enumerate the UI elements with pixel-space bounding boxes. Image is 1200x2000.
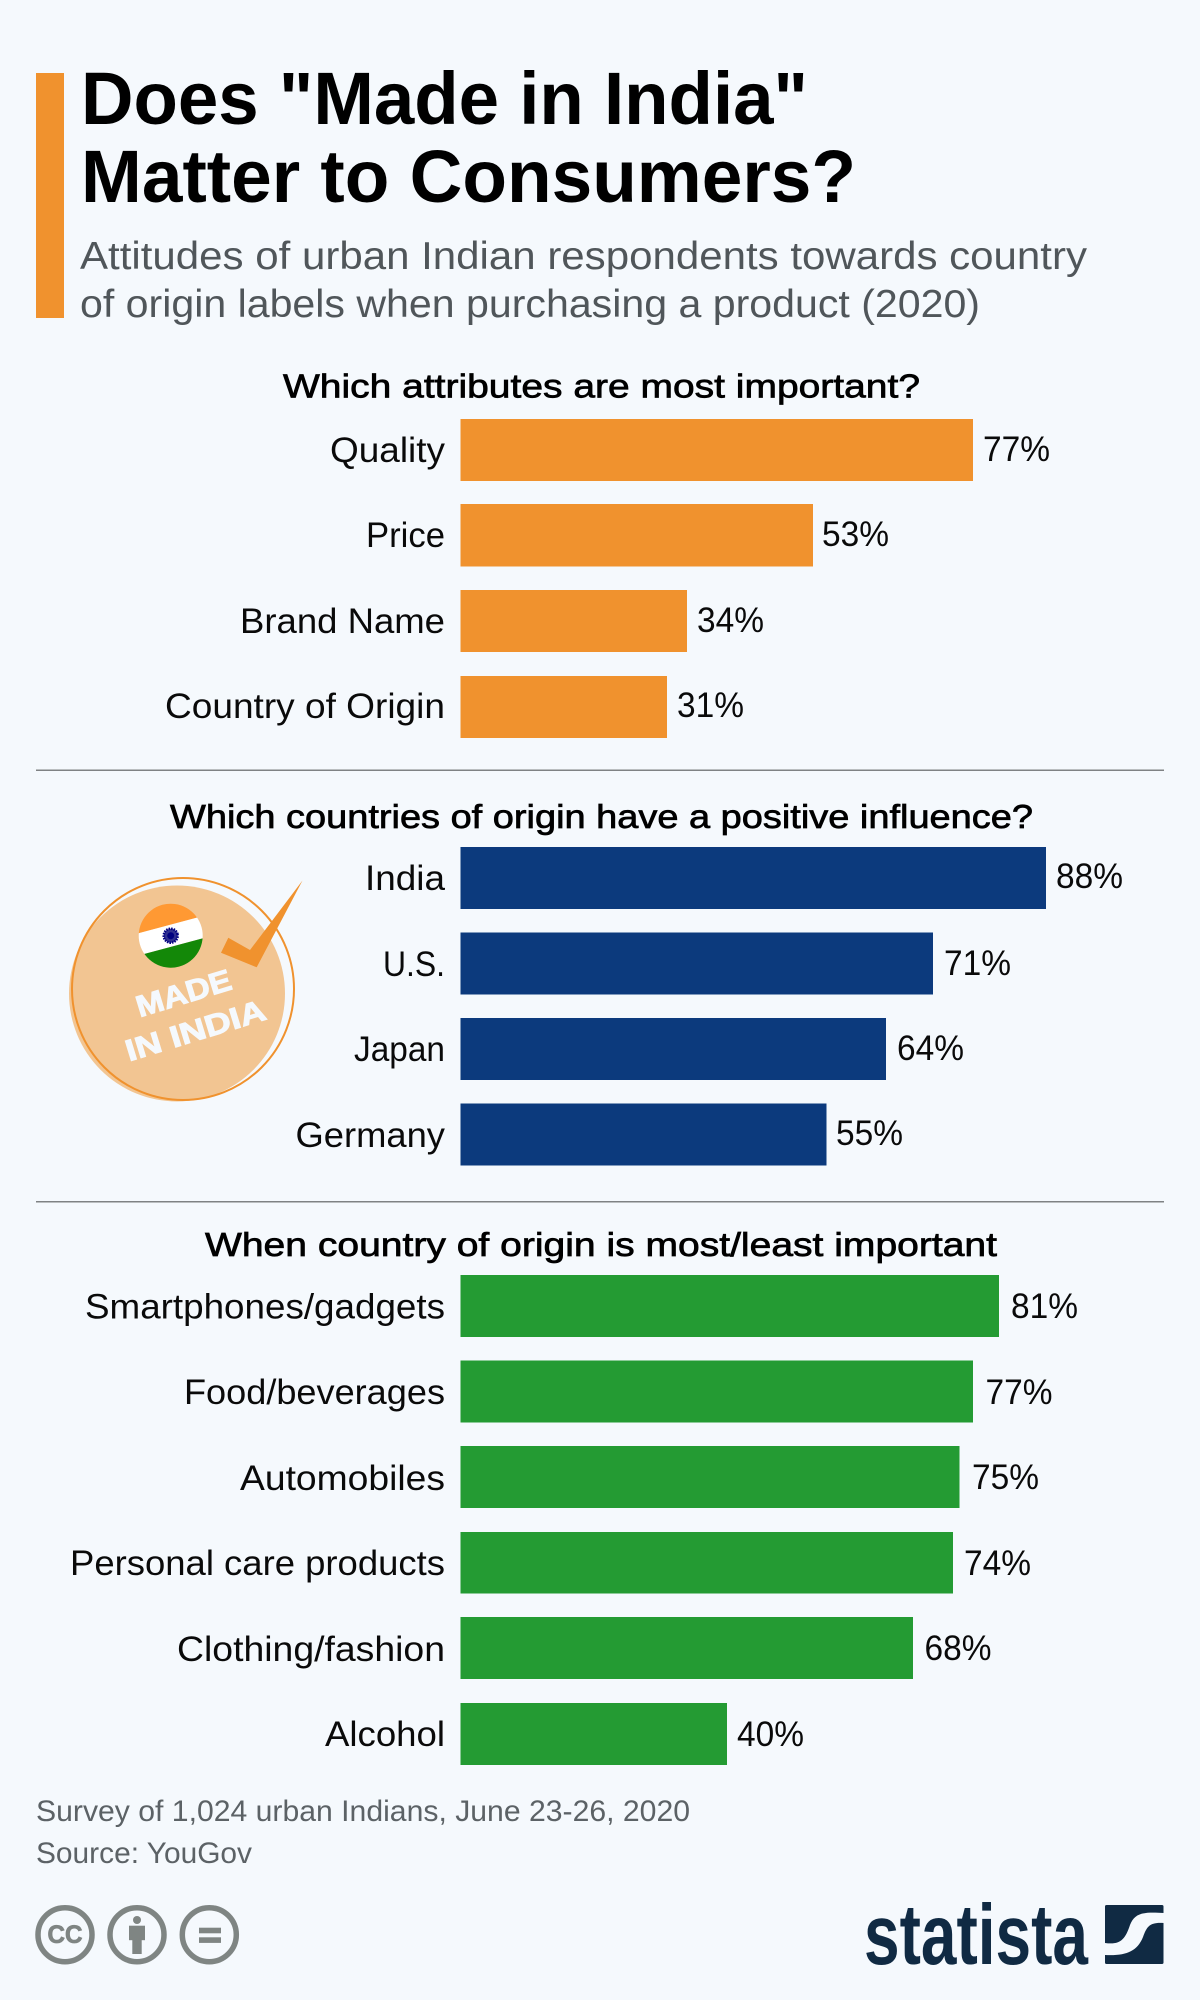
bar: Country of Origin 31%: Country of Origin [165,686,445,726]
bar: Quality 77%: 77% [983,429,1050,469]
bar: Germany 55%: Germany [296,1115,445,1155]
bar: Smartphones/gadgets 81%: 81% [1011,1286,1078,1326]
bar: Price 53% [366,504,889,566]
heading: countries: Which countries of origin have a positive influence? [170,798,1033,835]
badge text: MADE [132,964,236,1024]
accent bar [36,73,64,318]
bar: India 88% [365,847,1123,909]
bar: Germany 55% [296,1104,903,1166]
title: Does "Made in India" [81,57,808,140]
bar: Smartphones/gadgets 81%: Smartphones/gadgets [85,1286,445,1326]
bar: Japan 64%: 64% [897,1028,964,1068]
bar: Japan 64%: Japan [354,1029,445,1069]
bar: Alcohol 40%: Alcohol [325,1714,445,1754]
bar: Quality 77% [330,419,1050,481]
bar: Clothing/fashion 68% [177,1617,992,1679]
badge text: IN INDIA [122,994,270,1068]
bar: Clothing/fashion 68%: 68% [924,1628,992,1668]
bar: Personal care products 74%: 74% [964,1543,1031,1583]
bar: Brand Name 34%: Brand Name [240,601,445,641]
bar: Price 53%: 53% [822,514,889,554]
bar: Alcohol 40%: 40% [737,1714,804,1754]
bar: Country of Origin 31%: 31% [677,685,744,725]
bar: Germany 55%: 55% [836,1113,903,1153]
bar: Automobiles 75% [240,1446,1039,1508]
bar: Food/beverages 77% [184,1360,1052,1422]
icon: made in India badge [69,878,302,1102]
heading: product categories: When country of origin is most/least important [205,1226,997,1263]
title [81,57,856,218]
bar: Price 53%: Price [366,515,445,555]
header [36,57,1088,326]
icon: check mark [221,880,302,967]
bar: Japan 64% [354,1018,964,1080]
heading: attributes: Which attributes are most important? [283,368,920,404]
bar: Clothing/fashion 68%: Clothing/fashion [177,1629,445,1669]
bar: Brand Name 34% [240,590,764,652]
bar: Brand Name 34%: 34% [697,600,764,640]
icon: no derivatives [182,1908,236,1962]
bar: U.S. 71%: 71% [944,943,1011,983]
panel: countries with positive influence [170,798,1123,1166]
title: Matter to Consumers? [81,135,856,218]
bar: Smartphones/gadgets 81% [85,1275,1078,1337]
bar: U.S. 71% [383,932,1011,994]
bar: Personal care products 74% [70,1532,1031,1594]
logo: statista: statista [864,1888,1089,1983]
icons: creative commons licence [38,1908,236,1962]
bar: Quality 77%: Quality [330,430,445,470]
bar: Alcohol 40% [325,1703,804,1765]
bar: Food/beverages 77%: 77% [986,1372,1052,1412]
bar: Country of Origin 31% [165,676,744,738]
bar: India 88%: 88% [1056,856,1123,896]
source note: Survey of 1,024 urban Indians, June 23-26, 2020 [36,1795,690,1828]
subtitle: of origin labels when purchasing a product (2020) [80,283,980,326]
source note: Source: YouGov [36,1837,252,1870]
bar: U.S. 71%: U.S. [383,944,445,984]
bar: Personal care products 74%: Personal care products [70,1543,445,1583]
bar: Food/beverages 77%: Food/beverages [184,1372,445,1412]
subtitle [80,235,1088,326]
bar: Automobiles 75%: Automobiles [240,1458,445,1498]
badge text [110,957,270,1068]
panel: when country of origin matters [70,1226,1078,1765]
icon: Indian flag [138,904,203,968]
source note [36,1795,690,1870]
icon: statista mark [1105,1905,1164,1964]
icon: cc [38,1908,92,1962]
icon: cc: CC [48,1921,82,1949]
panel: most important attributes [165,368,1050,738]
bar: Automobiles 75%: 75% [972,1457,1039,1497]
icon: attribution [110,1908,164,1962]
bar: India 88%: India [365,858,445,898]
subtitle: Attitudes of urban Indian respondents towards country [80,235,1088,278]
